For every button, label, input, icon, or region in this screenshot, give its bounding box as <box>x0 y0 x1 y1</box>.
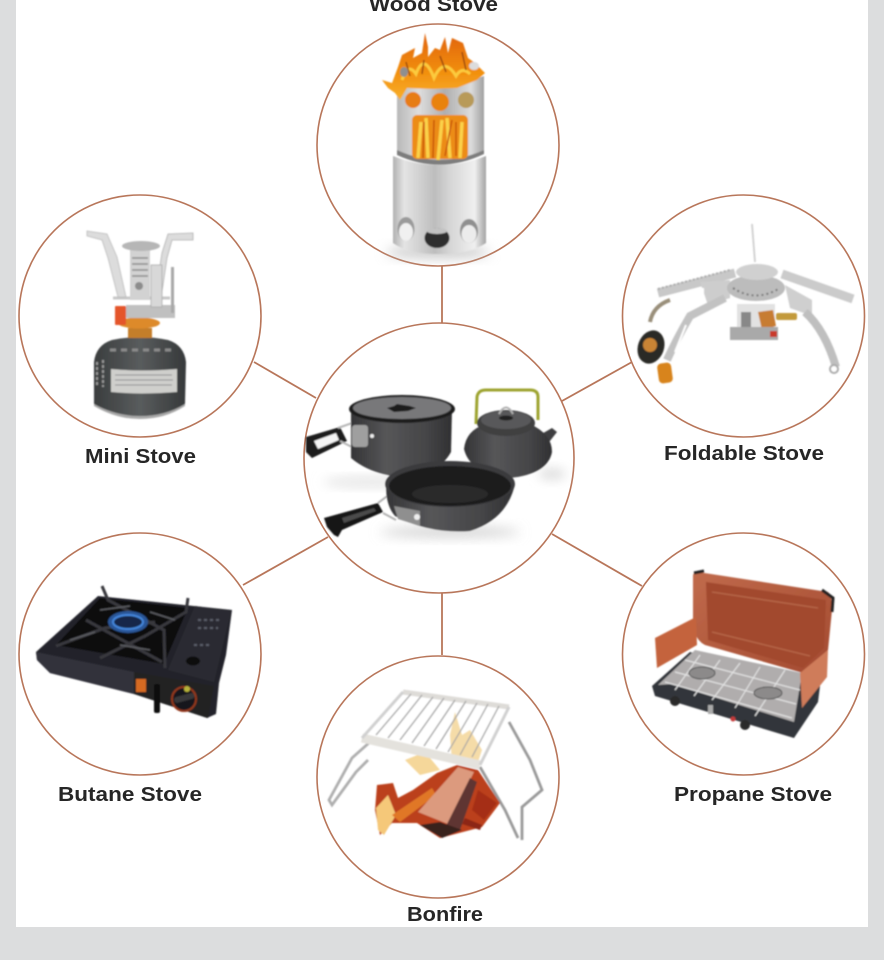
label: butane stove: Butane Stove <box>58 784 202 806</box>
connector lines <box>243 266 642 655</box>
node: wood stove <box>317 0 559 266</box>
icon: propane stove <box>652 571 833 738</box>
icon: mini stove <box>87 231 193 419</box>
node: mini stove <box>19 195 261 468</box>
icon: cookware set <box>306 390 566 537</box>
label: bonfire: Bonfire <box>407 904 483 926</box>
ring: propane stove <box>622 533 864 775</box>
icon: bonfire <box>329 692 542 840</box>
ring: mini stove <box>19 195 261 437</box>
ring: butane stove <box>19 533 261 775</box>
label: propane stove: Propane Stove <box>674 784 832 806</box>
kettle <box>464 390 557 478</box>
icon: wood stove <box>382 33 490 257</box>
ring: bonfire <box>317 656 559 898</box>
node: foldable stove <box>622 195 864 465</box>
node: propane stove <box>622 533 864 806</box>
ring: cookware set <box>304 323 574 593</box>
ring: foldable stove <box>622 195 864 437</box>
label: foldable stove: Foldable Stove <box>664 443 824 465</box>
ring: wood stove <box>317 24 559 266</box>
icon: butane stove <box>36 586 232 718</box>
node: cookware set <box>304 323 574 593</box>
pot <box>306 395 455 477</box>
icon: foldable stove <box>633 224 853 384</box>
label: mini stove: Mini Stove <box>85 446 196 468</box>
pan <box>324 461 515 537</box>
node: bonfire <box>317 656 559 926</box>
node: butane stove <box>19 533 261 806</box>
